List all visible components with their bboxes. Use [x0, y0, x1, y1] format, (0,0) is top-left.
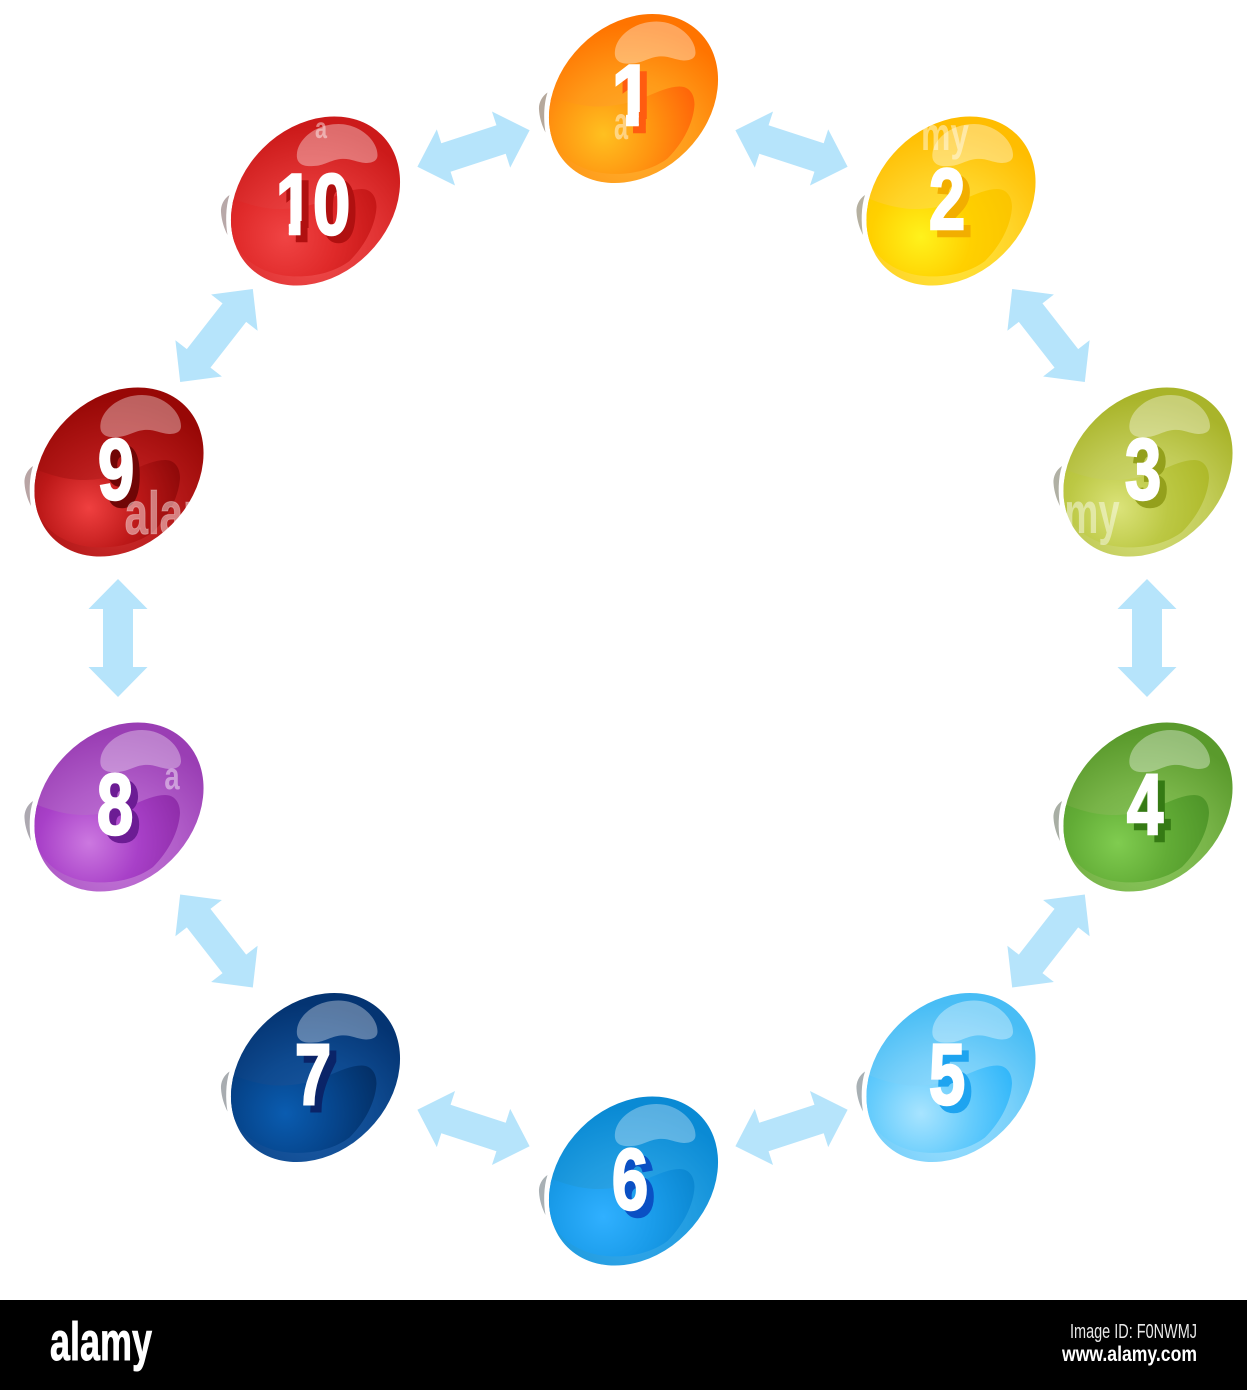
node 7: navy — [221, 993, 400, 1162]
node 10: red: 10 — [276, 157, 350, 253]
node 1: orange: a — [614, 97, 628, 149]
node 9: dark red: 9 — [105, 429, 141, 525]
node 6: blue: 6 — [619, 1139, 655, 1235]
node 8: purple — [24, 722, 204, 892]
node 3: olive: my — [1064, 482, 1120, 546]
arrow: between 5 and 6 — [726, 1082, 857, 1174]
arrow: between 6 and 7 — [408, 1082, 539, 1174]
node 5: light blue: 5 — [936, 1034, 972, 1130]
arrow: between 1 and 2 — [726, 102, 857, 195]
node 7: navy: 7 — [295, 1027, 331, 1123]
arrow: between 4 and 5 — [989, 876, 1108, 1006]
footer logo: alamy — [50, 1312, 152, 1372]
node 10: red: 10 — [283, 164, 357, 260]
node 6: blue — [539, 1096, 718, 1266]
node 5: light blue — [856, 993, 1036, 1162]
node 5: light blue: 5 — [929, 1027, 965, 1123]
node 6: blue: 6 — [612, 1132, 648, 1228]
node 8: purple: a — [164, 756, 180, 798]
node 4: green — [1054, 722, 1233, 892]
arrow: between 10 and 1 — [408, 102, 539, 195]
node 2: yellow: my — [921, 110, 970, 160]
node 2: yellow: 2 — [936, 159, 972, 255]
arrow: between 3 and 4 — [1118, 579, 1176, 697]
image id: Image ID: F0NWMJ — [1070, 1321, 1197, 1343]
node 3: olive: 3 — [1125, 422, 1161, 518]
node 9: dark red — [24, 388, 204, 556]
arrow: between 9 and 10 — [157, 271, 276, 400]
node 1: orange: 1 — [619, 54, 659, 150]
node 10: red — [221, 116, 400, 286]
node 3: olive — [1054, 388, 1233, 556]
node 1: orange: 1 — [612, 47, 652, 143]
node 4: green: 4 — [1134, 764, 1171, 860]
node 1: orange — [538, 14, 718, 183]
node 2: yellow — [856, 116, 1036, 286]
node 10: red: a — [315, 110, 327, 145]
node 3: olive: 3 — [1132, 429, 1168, 525]
node 4: green: 4 — [1127, 757, 1164, 853]
arrow: between 7 and 8 — [157, 876, 276, 1006]
node 8: purple: 8 — [97, 757, 133, 853]
website: www.alamy.com — [1061, 1343, 1197, 1366]
node 9: dark red: 9 — [98, 422, 134, 518]
arrow: between 2 and 3 — [989, 271, 1108, 400]
node 8: purple: 8 — [104, 764, 140, 860]
node 2: yellow: 2 — [929, 152, 965, 248]
node 9: dark red: alar — [125, 480, 199, 547]
footer bar — [0, 1300, 1247, 1390]
arrow: between 8 and 9 — [88, 579, 148, 697]
node 7: navy: 7 — [302, 1034, 338, 1130]
